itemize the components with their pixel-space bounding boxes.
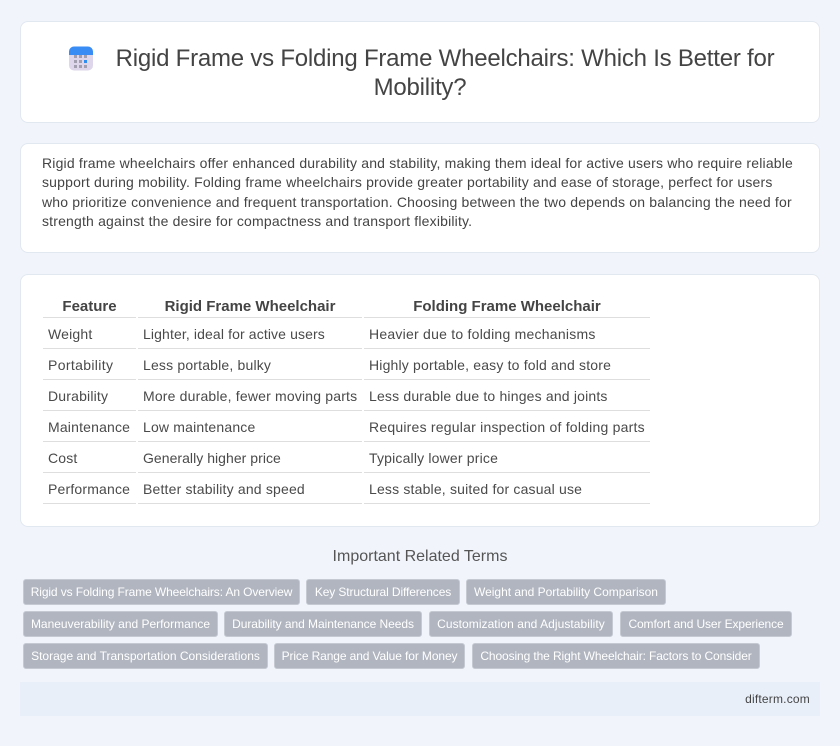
comparison table: Requires regular inspection of folding parts <box>369 419 645 435</box>
related terms heading: Important Related Terms <box>333 548 507 565</box>
comparison table: Heavier due to folding mechanisms <box>369 326 596 342</box>
comparison table: Folding Frame Wheelchair <box>413 298 601 315</box>
comparison table: Less portable, bulky <box>143 357 271 373</box>
footer site name: difterm.com <box>745 692 810 706</box>
related term tags: Maneuverability and Performance <box>31 617 210 631</box>
comparison table: Cost <box>48 450 78 466</box>
related term tags: Rigid vs Folding Frame Wheelchairs: An Overview <box>31 585 292 599</box>
footer bar <box>20 682 820 716</box>
comparison table: More durable, fewer moving parts <box>143 388 357 404</box>
related term tags: Storage and Transportation Considerations <box>31 649 260 663</box>
comparison table: Better stability and speed <box>143 481 305 497</box>
related term tags: Price Range and Value for Money <box>282 649 457 663</box>
comparison table: Durability <box>48 388 108 404</box>
comparison table: Generally higher price <box>143 450 281 466</box>
related term tags <box>23 579 792 669</box>
related term tags: Weight and Portability Comparison <box>474 585 658 599</box>
comparison table: Typically lower price <box>369 450 498 466</box>
comparison table: Lighter, ideal for active users <box>143 326 325 342</box>
table card <box>20 274 820 527</box>
related term tags: Choosing the Right Wheelchair: Factors to Consider <box>480 649 752 663</box>
comparison table: Less durable due to hinges and joints <box>369 388 608 404</box>
intro paragraph: Rigid frame wheelchairs offer enhanced durability and stability, making them ideal for active users who require reliable <box>42 154 793 170</box>
icon: calendar grid <box>69 46 93 70</box>
comparison table: Low maintenance <box>143 419 255 435</box>
title line 1: Rigid Frame vs Folding Frame Wheelchairs: Which Is Better for <box>116 45 774 72</box>
related term tags: Comfort and User Experience <box>628 617 784 631</box>
comparison table: Weight <box>48 326 92 342</box>
comparison table: Performance <box>48 481 130 497</box>
intro card <box>20 143 820 253</box>
intro paragraph: who prioritize convenience and frequent transportation. Choosing between the two depends on balancing the need for <box>42 194 792 210</box>
comparison table: Portability <box>48 357 113 373</box>
intro paragraph: support during mobility. Folding frame wheelchairs provide greater portability and ease of storage, perfect for users <box>42 174 772 190</box>
related term tags: Durability and Maintenance Needs <box>232 617 414 631</box>
related term tags: Key Structural Differences <box>315 585 451 599</box>
intro paragraph <box>42 154 793 229</box>
comparison table: Rigid Frame Wheelchair <box>165 298 335 315</box>
comparison table: Highly portable, easy to fold and store <box>369 357 611 373</box>
comparison table <box>43 298 650 504</box>
comparison table: Feature <box>62 298 117 315</box>
comparison table: Maintenance <box>48 419 130 435</box>
header card <box>20 21 820 123</box>
title line 2: Mobility? <box>374 74 466 101</box>
related term tags: Customization and Adjustability <box>437 617 605 631</box>
intro paragraph: strength against the desire for compactness and transport flexibility. <box>42 213 472 229</box>
comparison table: Less stable, suited for casual use <box>369 481 582 497</box>
